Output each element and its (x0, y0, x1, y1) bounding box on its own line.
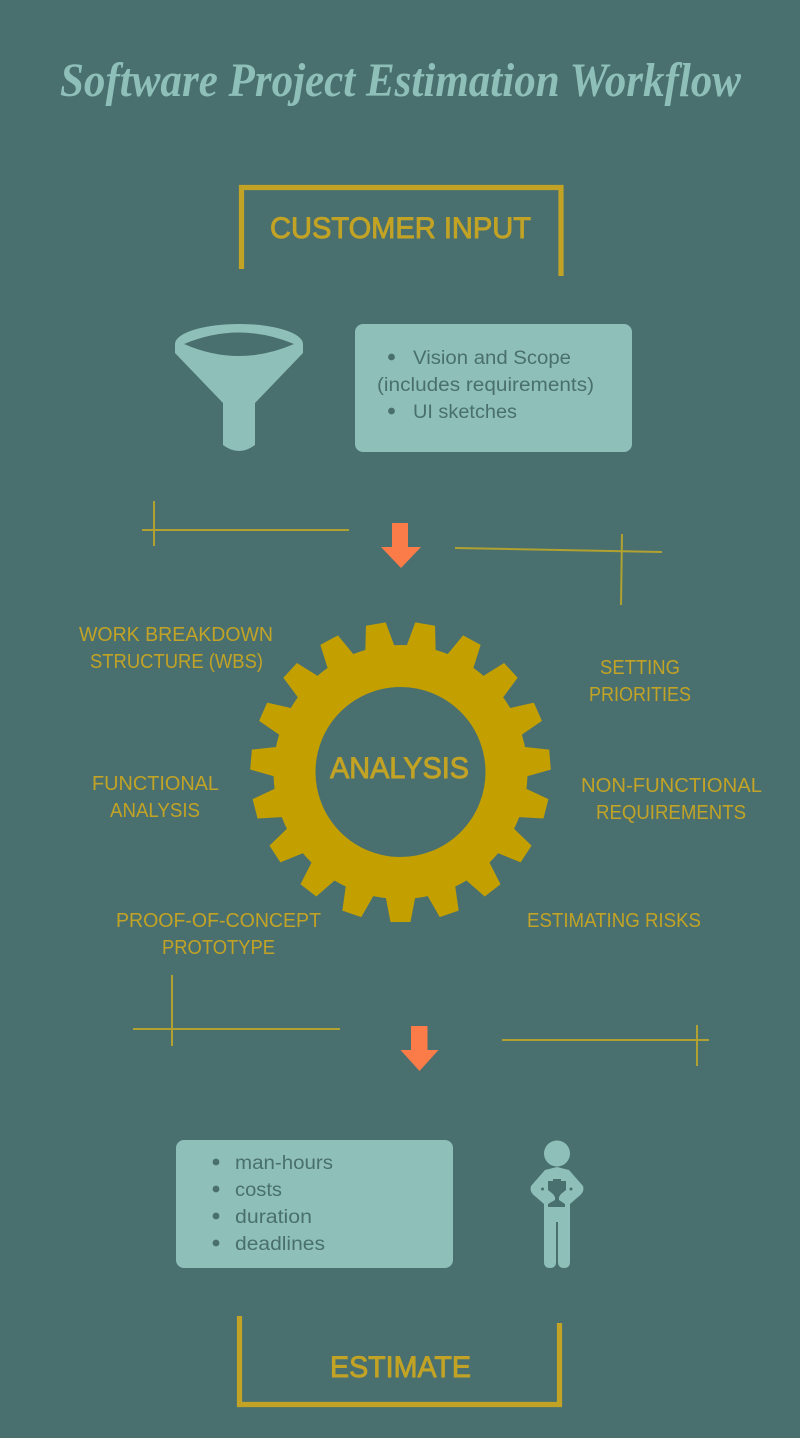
arrow: analysis to estimate (400, 1026, 438, 1071)
label: estimating risks: ESTIMATING RISKS (527, 910, 701, 932)
panel: estimate list (176, 1140, 453, 1268)
panel: estimate list: duration (235, 1207, 312, 1228)
label: work breakdown structure (79, 624, 273, 673)
icon: person holding trophy (531, 1140, 583, 1268)
panel: estimate list: deadlines (235, 1234, 325, 1255)
estimate heading with bracket (240, 1316, 560, 1404)
label: proof-of-concept prototype (116, 910, 321, 959)
panel: estimate list: man-hours (235, 1153, 333, 1174)
left cross line, lower (133, 975, 340, 1046)
right cross line, upper (455, 534, 662, 605)
label: functional analysis: FUNCTIONAL (92, 773, 219, 795)
estimate heading with bracket: ESTIMATE (330, 1351, 471, 1384)
panel: customer input list (355, 324, 632, 452)
arrow: customer input to analysis (381, 523, 421, 568)
label: functional analysis: ANALYSIS (110, 800, 200, 822)
label: setting priorities: PRIORITIES (589, 684, 691, 706)
label: proof-of-concept prototype: PROTOTYPE (162, 937, 275, 959)
panel: customer input list: (includes requirements) (377, 375, 594, 396)
right cross line, lower (502, 1025, 709, 1066)
label: work breakdown structure: WORK BREAKDOWN (79, 624, 273, 646)
panel: estimate list: costs (235, 1180, 282, 1201)
label: functional analysis (92, 773, 219, 822)
customer input heading with bracket (242, 188, 561, 276)
customer input heading with bracket: CUSTOMER INPUT (270, 212, 531, 245)
label: setting priorities (589, 657, 691, 706)
left cross line, upper (142, 501, 349, 546)
label: non-functional requirements: NON-FUNCTIONAL (581, 775, 762, 797)
label: non-functional requirements (581, 775, 762, 824)
panel: customer input list: UI sketches (413, 402, 517, 423)
label: proof-of-concept prototype: PROOF-OF-CONCEPT (116, 910, 321, 932)
icon: funnel (175, 324, 303, 451)
title: Software Project Estimation Workflow (60, 54, 742, 107)
gear: analysis: ANALYSIS (330, 752, 469, 785)
label: work breakdown structure: STRUCTURE (WBS) (90, 651, 263, 673)
gear: analysis (250, 622, 551, 922)
label: setting priorities: SETTING (600, 657, 680, 679)
label: non-functional requirements: REQUIREMENTS (596, 802, 746, 824)
panel: customer input list: Vision and Scope (413, 348, 571, 369)
